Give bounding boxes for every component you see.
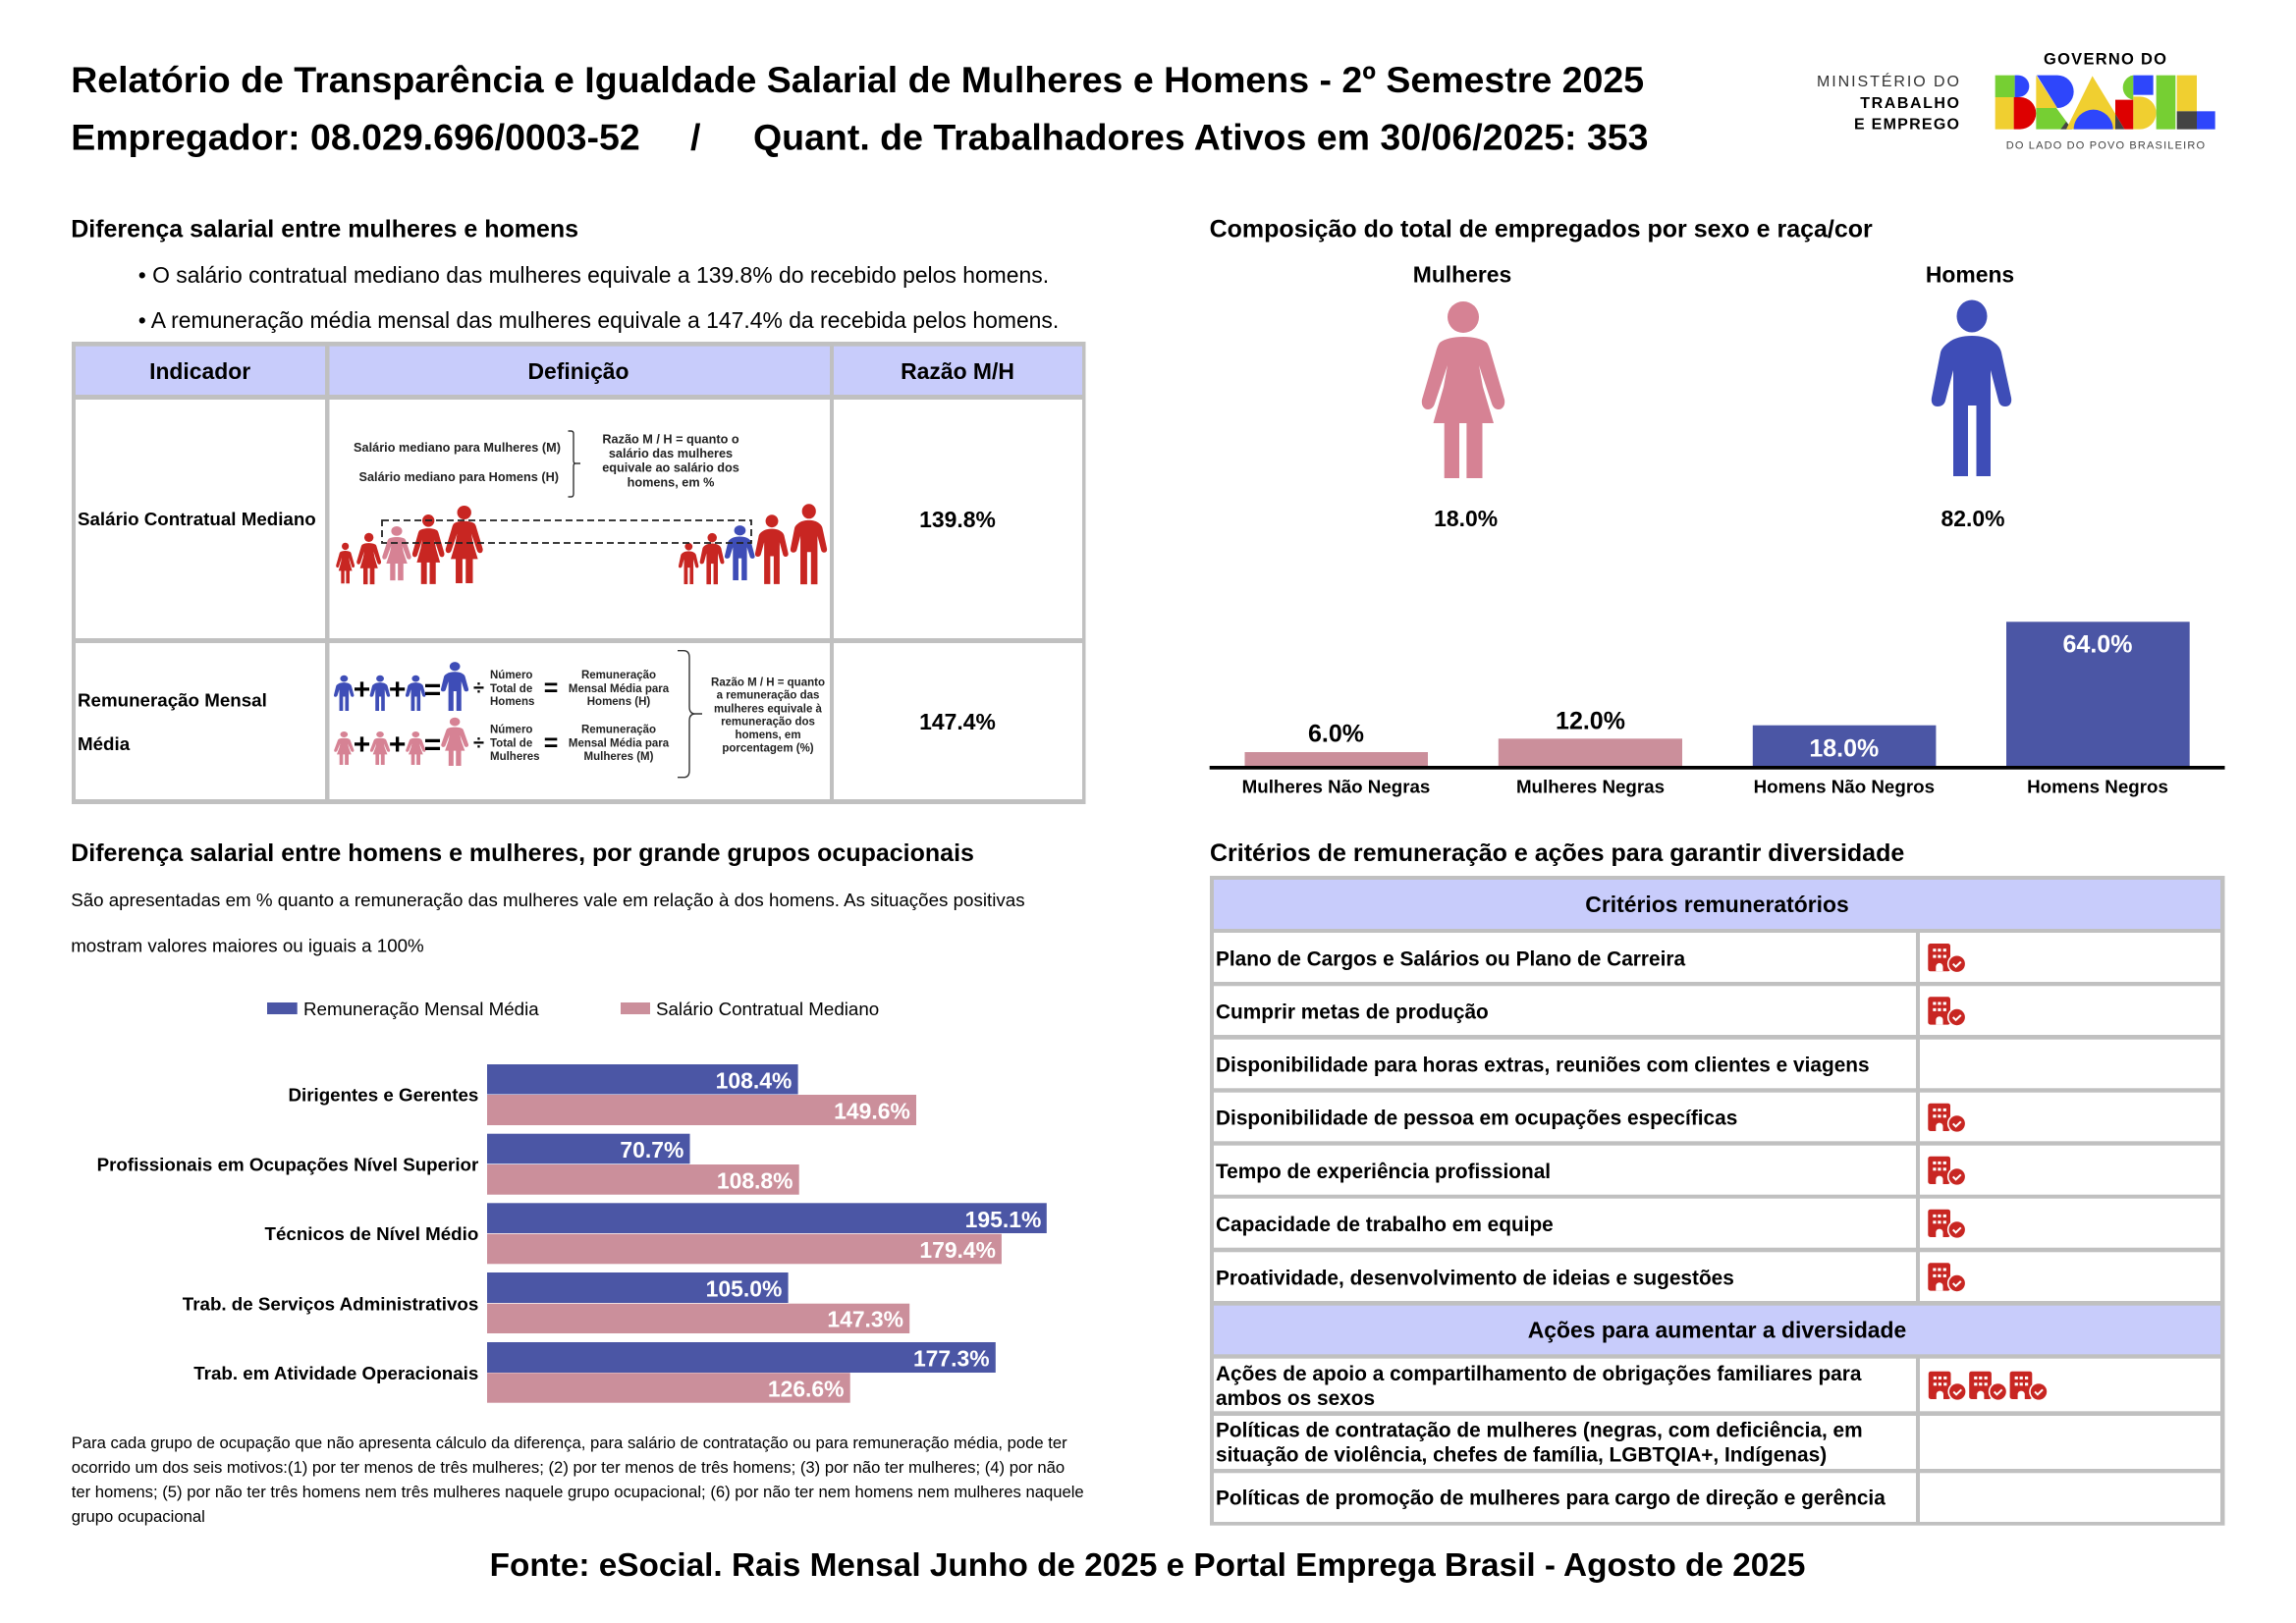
- bar chart: raça/cor: Mulheres Negras: [1516, 777, 1665, 797]
- bar chart: grupos: 147.3%: [827, 1307, 903, 1332]
- diagram: salário mediano: salário das mulheres: [609, 447, 733, 460]
- diagram: remuneração média: +: [354, 729, 370, 761]
- figure: mulheres: 18.0%: [1434, 506, 1498, 531]
- text block: nota de rodapé: [72, 1434, 1084, 1526]
- table: critérios: Tempo de experiência profissional: [1216, 1161, 1551, 1183]
- bar chart: grupos: 195.1%: [965, 1207, 1041, 1232]
- text block: nota de rodapé: grupo ocupacional: [72, 1507, 205, 1526]
- source line: Fonte: eSocial. Rais Mensal Junho de 2025 e Portal Emprega Brasil - Agosto de 2025: [490, 1547, 1805, 1584]
- title: Relatório de Transparência e Igualdade Salarial de Mulheres e Homens - 2º Semestre 2025: [71, 59, 1644, 100]
- table: indicadores: Média: [78, 733, 131, 754]
- diagram: remuneração média: Total de: [490, 737, 532, 749]
- icons: empresa com check: [1928, 944, 2049, 1401]
- text block: explicação: mostram valores maiores ou iguais a 100%: [71, 935, 424, 955]
- table: critérios: Proatividade, desenvolvimento de ideias e sugestões: [1216, 1267, 1734, 1289]
- diagram: remuneração média: homens, em: [735, 730, 801, 741]
- diagram: salário mediano: Salário mediano para Homens (H): [359, 470, 559, 484]
- logo: Ministério do Trabalho e Emprego: TRABALHO: [1860, 95, 1959, 112]
- diagram: remuneração média: Mensal Média para: [569, 737, 670, 749]
- legend: Remuneração Mensal Média: [303, 999, 539, 1019]
- logo: Ministério do Trabalho e Emprego: E EMPREGO: [1854, 117, 1959, 134]
- diagram: remuneração média: ÷: [473, 732, 484, 754]
- bar chart: grupos: Dirigentes e Gerentes: [288, 1085, 478, 1106]
- diagram: remuneração média: mulheres equivale à: [714, 703, 823, 715]
- table: critérios: Disponibilidade de pessoa em ocupações específicas: [1216, 1107, 1737, 1129]
- panel: diferença salarial: [71, 216, 1086, 804]
- bar chart: raça/cor: 18.0%: [1809, 735, 1879, 763]
- panel: critérios de remuneração: [1210, 839, 2225, 1526]
- text block: explicação: [71, 890, 1025, 955]
- bar chart: raça/cor: Homens Não Negros: [1754, 777, 1935, 797]
- table: critérios: Políticas de contratação de mulheres (negras, com deficiência, em: [1216, 1420, 1863, 1442]
- title: /: [690, 117, 701, 158]
- logo: Governo do Brasil: DO LADO DO POVO BRASILEIRO: [2006, 140, 2205, 152]
- heading: Diferença salarial entre mulheres e homens: [71, 216, 578, 243]
- figure: homens: [1926, 261, 2014, 531]
- diagram: remuneração média: Remuneração: [581, 670, 656, 681]
- table: indicadores: Razão M/H: [901, 358, 1014, 384]
- diagram: remuneração média: Mulheres (M): [584, 751, 654, 763]
- table: indicadores: 147.4%: [919, 709, 996, 734]
- diagram: salário mediano: Salário mediano para Mulheres (M): [354, 441, 561, 455]
- text block: bullets: • A remuneração média mensal das mulheres equivale a 147.4% da recebida pelos homens.: [138, 307, 1059, 333]
- bar chart: grupos: [97, 1064, 1047, 1403]
- text block: nota de rodapé: ter homens; (5) por não ter três homens nem três mulheres naquele grupo ocupacional; (6) por não ter nem homens nem mulheres naquele: [72, 1483, 1084, 1501]
- bar chart: raça/cor: Mulheres Não Negras: [1242, 777, 1430, 797]
- table: critérios: Políticas de promoção de mulheres para cargo de direção e gerência: [1216, 1488, 1886, 1510]
- diagram: remuneração média: ÷: [473, 677, 484, 699]
- table: indicadores: [72, 342, 1086, 804]
- diagram: remuneração média: +: [389, 729, 406, 761]
- diagram: remuneração média: Número: [490, 725, 532, 736]
- text block: nota de rodapé: ocorrido um dos seis motivos:(1) por ter menos de três mulheres; (2) por ter menos de três homens; (3) por não ter mulheres; (4) por não: [72, 1458, 1065, 1477]
- bar chart: grupos: 179.4%: [919, 1237, 996, 1263]
- bar chart: grupos: Profissionais em Ocupações Nível Superior: [97, 1155, 479, 1175]
- table: critérios: Ações de apoio a compartilhamento de obrigações familiares para: [1216, 1363, 1862, 1385]
- diagram: remuneração média: +: [389, 674, 406, 706]
- diagram: remuneração média: Homens: [490, 696, 534, 708]
- table: indicadores: Salário Contratual Mediano: [78, 509, 316, 529]
- logo: Ministério do Trabalho e Emprego: [1817, 72, 1959, 134]
- diagram: salário mediano: homens, em %: [628, 475, 714, 489]
- heading: Composição do total de empregados por sexo e raça/cor: [1210, 216, 1873, 243]
- table: critérios: [1210, 876, 2225, 1526]
- figure: homens: 82.0%: [1941, 506, 2004, 531]
- diagram: salário mediano: Razão M / H = quanto o: [602, 433, 739, 447]
- bar chart: raça/cor: Homens Negros: [2027, 777, 2168, 797]
- table: critérios: situação de violência, chefes de família, LGBTQIA+, Indígenas): [1216, 1444, 1827, 1467]
- table: indicadores: Indicador: [149, 358, 250, 384]
- bar chart: raça/cor: 64.0%: [2063, 630, 2132, 658]
- diagram: remuneração média: Mulheres: [490, 751, 540, 763]
- bar chart: raça/cor: 6.0%: [1308, 721, 1364, 748]
- bar chart: grupos: 108.4%: [716, 1067, 792, 1093]
- bar chart: grupos: 149.6%: [834, 1098, 910, 1123]
- panel: composição do total: [1210, 216, 2225, 797]
- diagram: remuneração média: =: [544, 730, 558, 757]
- bar chart: raça/cor: [1210, 622, 2225, 797]
- logo: Ministério do Trabalho e Emprego: MINISTÉRIO DO: [1817, 72, 1959, 90]
- diagram: remuneração média: =: [424, 729, 441, 761]
- text block: bullets: [138, 262, 1059, 333]
- bar chart: grupos: 126.6%: [768, 1376, 845, 1401]
- title: Empregador: 08.029.696/0003-52: [71, 117, 640, 158]
- text block: nota de rodapé: Para cada grupo de ocupação que não apresenta cálculo da diferença, para salário de contratação ou para remuneração média, pode ter: [72, 1434, 1067, 1452]
- diagram: remuneração média: +: [354, 674, 370, 706]
- diagram: salário mediano: equivale ao salário dos: [602, 461, 739, 475]
- bar chart: grupos: Técnicos de Nível Médio: [265, 1223, 478, 1244]
- table: indicadores: Remuneração Mensal: [78, 689, 267, 710]
- diagram: remuneração média: Remuneração: [581, 725, 656, 736]
- diagram: remuneração média: Número: [490, 670, 532, 681]
- title: [71, 59, 1649, 158]
- diagram: remuneração média: porcentagem (%): [722, 742, 814, 754]
- figure: mulheres: Mulheres: [1413, 261, 1511, 287]
- title: Quant. de Trabalhadores Ativos em 30/06/2025: 353: [753, 117, 1649, 158]
- diagram: remuneração média: remuneração dos: [721, 717, 815, 729]
- table: critérios: Critérios remuneratórios: [1585, 892, 1849, 917]
- logo: Governo do Brasil: [1995, 51, 2215, 152]
- table: critérios: Capacidade de trabalho em equipe: [1216, 1214, 1554, 1236]
- heading: Critérios de remuneração e ações para garantir diversidade: [1210, 839, 1904, 867]
- table: critérios: ambos os sexos: [1216, 1387, 1375, 1410]
- table: indicadores: Definição: [527, 358, 629, 384]
- bar chart: grupos: 108.8%: [717, 1167, 793, 1193]
- bar chart: grupos: Trab. de Serviços Administrativos: [183, 1293, 478, 1314]
- diagram: remuneração média: =: [424, 674, 441, 706]
- diagram: remuneração média: Mensal Média para: [569, 683, 670, 695]
- bar chart: grupos: 105.0%: [706, 1275, 782, 1301]
- legend: Salário Contratual Mediano: [656, 999, 879, 1019]
- logo: Governo do Brasil: GOVERNO DO: [2044, 51, 2166, 69]
- bar chart: raça/cor: 12.0%: [1556, 708, 1625, 735]
- bar chart: grupos: 70.7%: [620, 1137, 683, 1163]
- table: indicadores: 139.8%: [919, 507, 996, 532]
- table: critérios: Ações para aumentar a diversidade: [1528, 1318, 1906, 1343]
- diagram: remuneração média: a remuneração das: [717, 690, 819, 702]
- table: critérios: Cumprir metas de produção: [1216, 1001, 1489, 1023]
- diagram: remuneração média: Homens (H): [587, 696, 650, 708]
- figure: mulheres: [1413, 261, 1511, 531]
- text block: explicação: São apresentadas em % quanto a remuneração das mulheres vale em relação à dos homens. As situações positivas: [71, 890, 1025, 910]
- diagram: remuneração média: Razão M / H = quanto: [711, 676, 825, 688]
- diagram: salário mediano: [336, 431, 827, 584]
- bar chart: grupos: Trab. em Atividade Operacionais: [193, 1363, 478, 1383]
- bar chart: grupos: 177.3%: [913, 1345, 990, 1371]
- figure: homens: Homens: [1926, 261, 2014, 287]
- table: critérios: Plano de Cargos e Salários ou Plano de Carreira: [1216, 947, 1685, 970]
- diagram: remuneração média: =: [544, 675, 558, 702]
- text block: bullets: • O salário contratual mediano das mulheres equivale a 139.8% do recebido pelos homens.: [138, 262, 1049, 288]
- table: critérios: Disponibilidade para horas extras, reuniões com clientes e viagens: [1216, 1054, 1870, 1076]
- diagram: remuneração média: [334, 651, 825, 778]
- diagram: remuneração média: Total de: [490, 683, 532, 695]
- heading: Diferença salarial entre homens e mulheres, por grande grupos ocupacionais: [71, 839, 974, 867]
- panel: grupos ocupacionais: [71, 839, 1084, 1526]
- legend: [267, 999, 879, 1019]
